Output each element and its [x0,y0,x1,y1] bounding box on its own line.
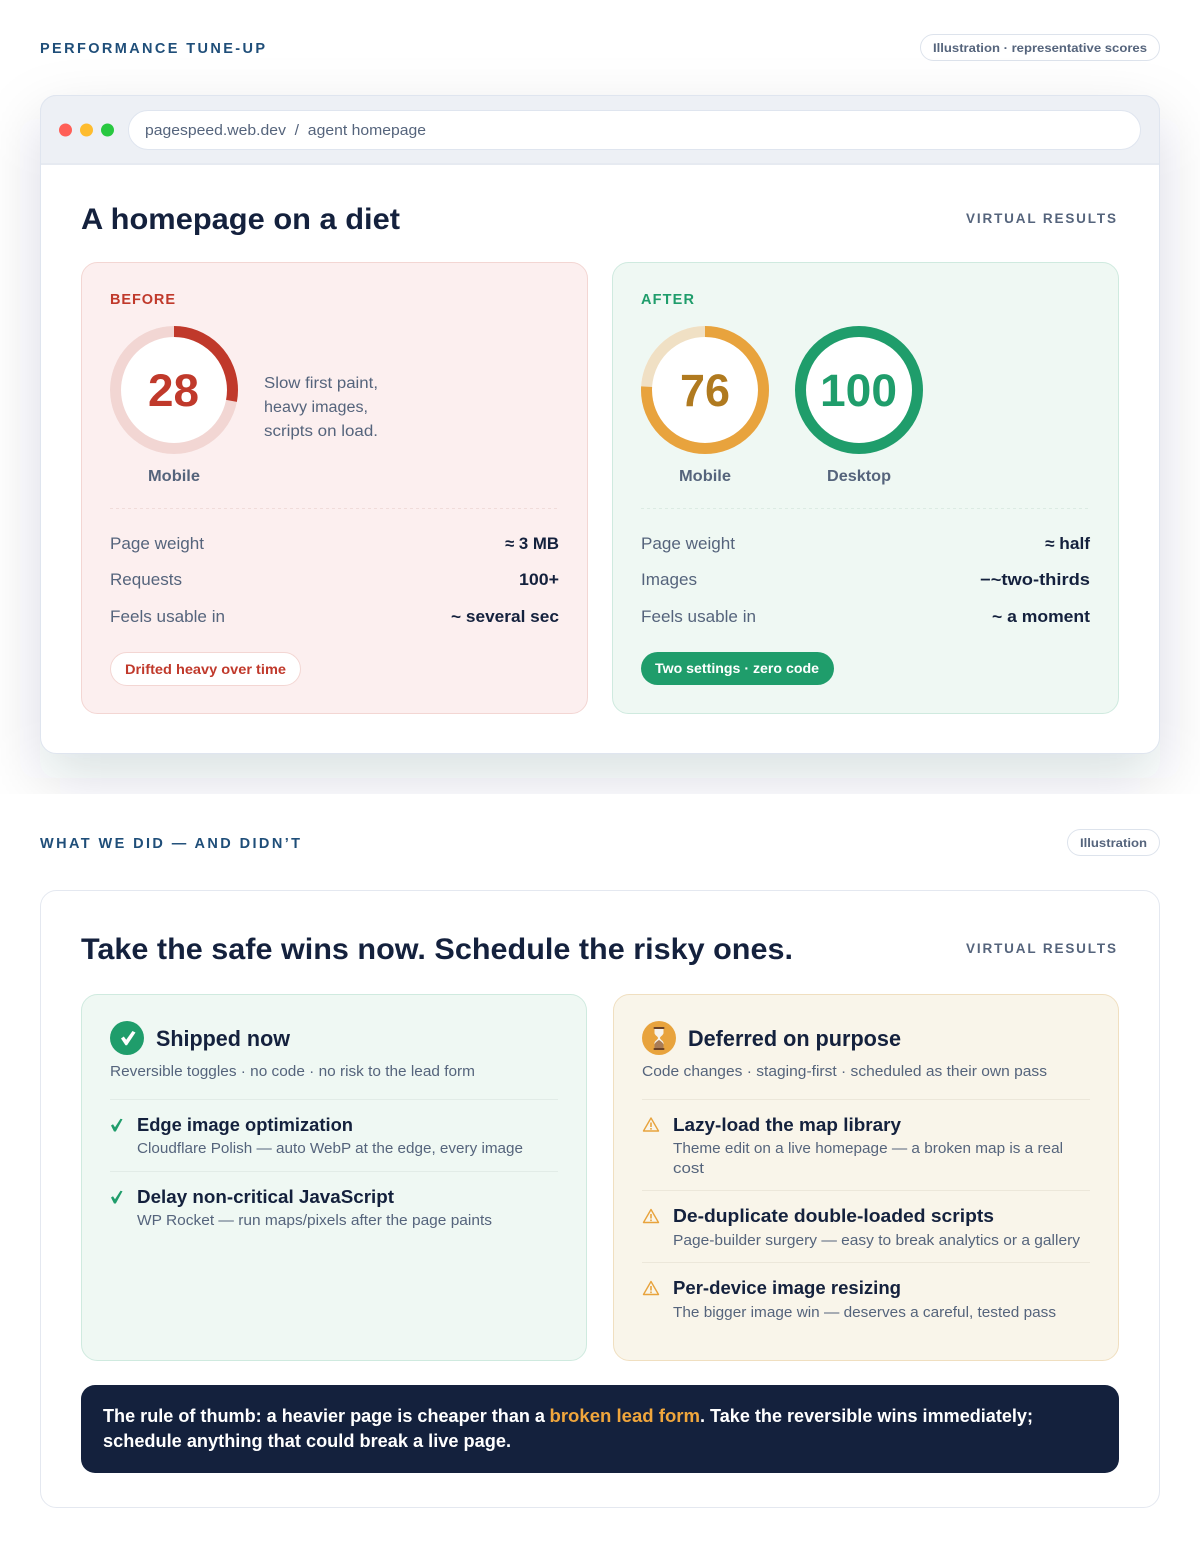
metrics: before: 100+ [519,571,559,589]
metrics: after [641,535,1091,626]
title: take the safe wins now: Take the safe wins now. Schedule the risky ones. [81,933,793,966]
panel: before [82,262,588,714]
callout: rule of thumb: The rule of thumb: a heavier page is cheaper than a [103,1406,546,1426]
panel: browser window [40,95,1160,778]
pill: illustration [1068,830,1160,856]
score ring: mobile 76 [641,326,769,454]
metrics: before: ≈ 3 MB [505,535,559,553]
label: virtual results: VIRTUAL RESULTS [966,211,1116,226]
score ring: desktop 100 [795,326,923,454]
metrics: after: −~two-thirds [980,571,1090,589]
heading: shipped now: Shipped now [156,1026,291,1051]
callout: rule of thumb [81,1385,1119,1473]
callout: rule of thumb: . Take the reversible wins immediately; [700,1406,1033,1426]
item: lazy-load the map library: Theme edit on a live homepage — a broken map is a real [673,1140,1063,1157]
item: per-device image resizing: The bigger image win — deserves a careful, tested pass [673,1304,1056,1321]
subheading: Code changes · staging-first · scheduled as their own pass [642,1063,1047,1080]
item: edge image optimization: Edge image optimization [137,1114,353,1135]
badge: two settings zero code: Two settings · zero code [655,661,820,676]
icon: check badge [110,1021,144,1055]
ring caption: mobile: Mobile [679,468,731,485]
before description: heavy images, [264,399,368,416]
title: a homepage on a diet: A homepage on a diet [81,203,400,236]
item: delay non-critical javascript: WP Rocket — run maps/pixels after the page paints [137,1212,492,1229]
pill: illustration: Illustration [1080,836,1147,850]
section heading: what we did and didn't: WHAT WE DID — AND DIDN’T [40,836,300,852]
item: per-device image resizing [644,1277,1056,1321]
subheading: Reversible toggles · no code · no risk to the lead form [110,1063,475,1080]
panel: wins card [40,890,1160,1508]
browser title bar [40,95,1160,165]
badge: two settings zero code [641,652,834,685]
ring caption: desktop: Desktop [827,468,891,485]
panel: after [612,262,1118,714]
score ring: mobile 28 [110,326,238,454]
item: per-device image resizing: Per-device image resizing [673,1277,901,1298]
metrics: before: Requests [110,571,182,589]
badge: drifted heavy over time [110,652,300,686]
label: after: AFTER [641,292,695,308]
score ring: desktop 100: 100 [820,365,897,416]
metrics: after: Feels usable in [641,608,756,626]
item: lazy-load the map library: Lazy-load the map library [673,1114,902,1135]
score ring: mobile 28: 28 [148,365,199,416]
panel: shipped now [82,994,586,1360]
callout: rule of thumb: schedule anything that could break a live page. [103,1431,511,1451]
metrics: before: Feels usable in [110,608,225,626]
before description [264,375,378,440]
label: virtual results: VIRTUAL RESULTS [966,941,1116,956]
item: delay non-critical javascript [111,1186,492,1229]
metrics: after: ≈ half [1045,535,1091,553]
metrics: before: ~ several sec [451,608,559,626]
metrics: before [110,535,559,626]
item: edge image optimization [111,1114,523,1157]
section heading: performance tune-up: PERFORMANCE TUNE-UP [40,41,265,57]
metrics: before: Page weight [110,535,204,553]
callout: rule of thumb: broken lead form [550,1406,700,1426]
browser title bar: pagespeed.web.dev / agent homepage [145,122,426,139]
badge: drifted heavy over time: Drifted heavy over time [125,662,287,677]
item: edge image optimization: Cloudflare Polish — auto WebP at the edge, every image [137,1140,523,1157]
item: de-duplicate scripts [644,1205,1081,1249]
item: de-duplicate scripts: Page-builder surgery — easy to break analytics or a gallery [673,1232,1081,1249]
before description: Slow first paint, [264,375,378,392]
item: delay non-critical javascript: Delay non-critical JavaScript [137,1186,394,1207]
item: lazy-load the map library: cost [673,1160,705,1177]
icon: hourglass [642,1021,676,1055]
item: de-duplicate scripts: De-duplicate double-loaded scripts [673,1205,994,1226]
before description: scripts on load. [264,423,378,440]
pill: illustration representative scores: Illustration · representative scores [933,41,1147,55]
metrics: after: ~ a moment [992,608,1091,626]
item: lazy-load the map library [644,1114,1063,1177]
metrics: after: Images [641,571,697,589]
metrics: after: Page weight [641,535,735,553]
heading: deferred on purpose: Deferred on purpose [688,1026,901,1051]
label: before: BEFORE [110,292,175,308]
score ring: mobile 76: 76 [680,365,730,416]
pill: illustration representative scores [920,34,1160,60]
ring caption: mobile: Mobile [148,468,200,485]
panel: deferred on purpose [614,994,1118,1360]
